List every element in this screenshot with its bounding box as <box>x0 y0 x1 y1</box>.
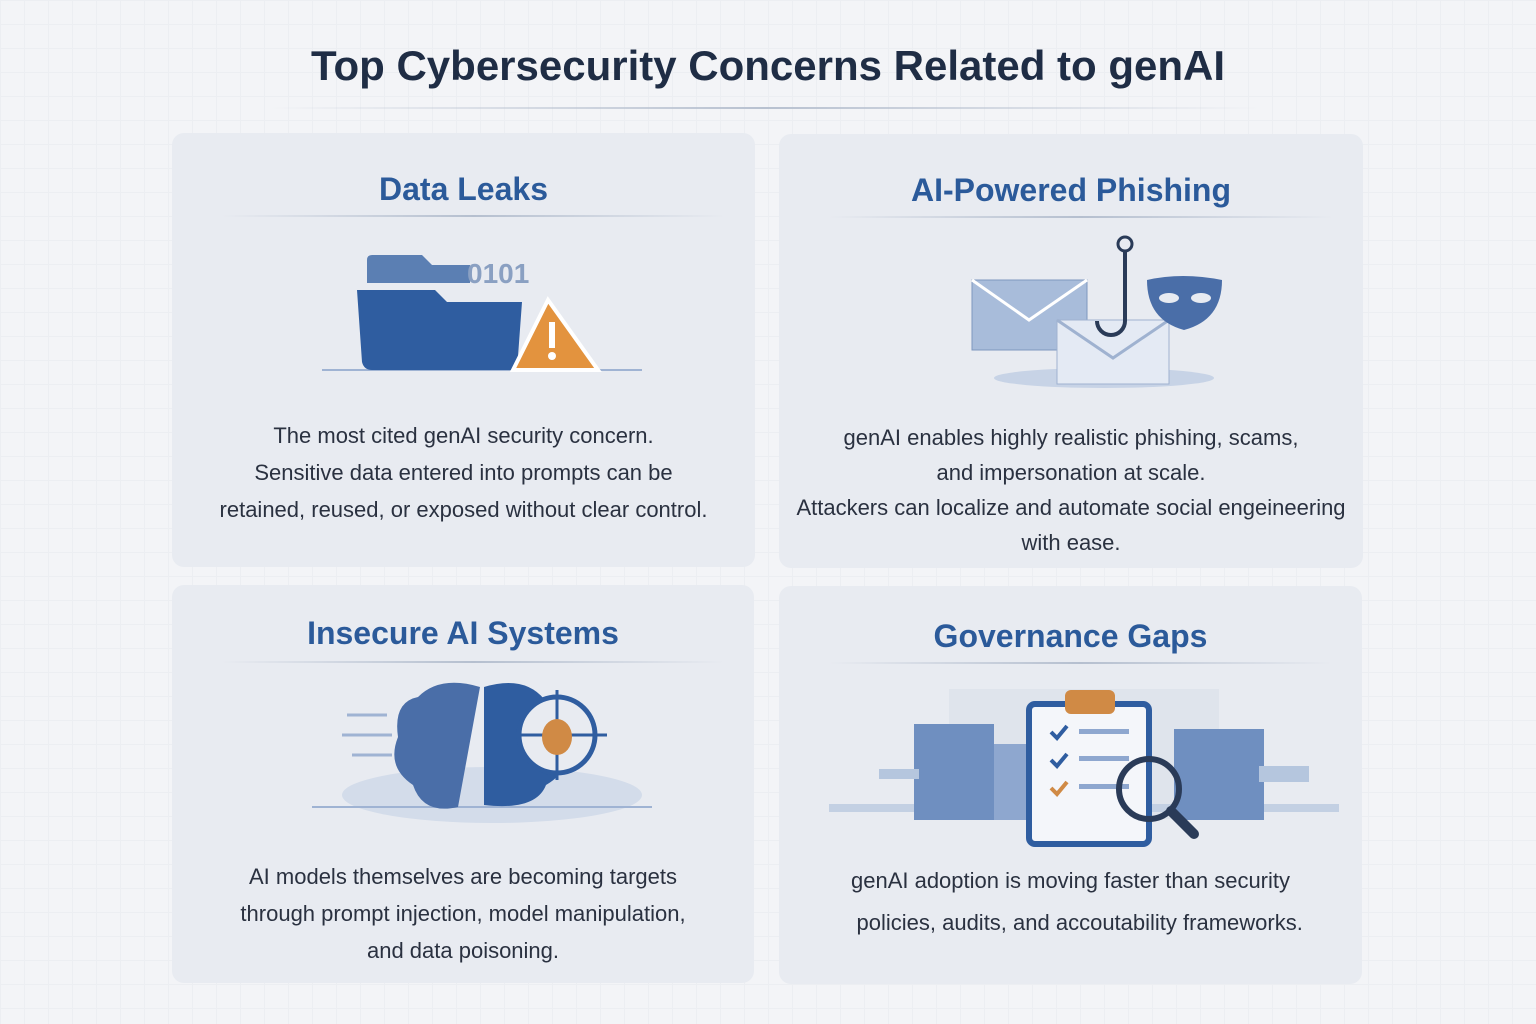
text: insecure: through prompt injection, model manipulation, <box>240 901 686 926</box>
panel: phishing <box>779 134 1363 568</box>
title: Top Cybersecurity Concerns Related to genAI <box>311 42 1225 89</box>
icon: folder with warning: 0101 <box>467 258 529 289</box>
icon: buildings, clipboard, magnifier <box>829 689 1339 847</box>
heading: insecure: Insecure AI Systems <box>307 615 619 651</box>
text: phishing <box>796 425 1346 555</box>
text: phishing: genAI enables highly realistic phishing, scams, <box>844 425 1298 450</box>
icon: folder with warning <box>322 255 642 372</box>
text: data leaks: The most cited genAI security concern. <box>273 423 654 448</box>
text: governance <box>851 868 1303 935</box>
text: data leaks <box>220 423 707 522</box>
panel: insecure AI systems <box>172 585 754 983</box>
text: governance: policies, audits, and accoutability frameworks. <box>856 910 1303 935</box>
heading: governance: Governance Gaps <box>934 618 1207 654</box>
text: data leaks: Sensitive data entered into prompts can be <box>254 460 673 485</box>
text: phishing: Attackers can localize and automate social engeineering <box>796 495 1346 520</box>
text: insecure <box>240 864 686 963</box>
text: data leaks: retained, reused, or exposed without clear control. <box>220 497 707 522</box>
panel: governance gaps <box>779 586 1362 984</box>
text: governance: genAI adoption is moving faster than security <box>851 868 1290 893</box>
text: insecure: AI models themselves are becoming targets <box>249 864 677 889</box>
heading: phishing: AI-Powered Phishing <box>911 172 1231 208</box>
heading: data leaks: Data Leaks <box>379 171 548 207</box>
text: phishing: and impersonation at scale. <box>936 460 1206 485</box>
icon: brain with target <box>312 682 652 823</box>
icon: envelopes, hook, mask <box>971 236 1222 388</box>
text: insecure: and data poisoning. <box>367 938 559 963</box>
text: phishing: with ease. <box>1021 530 1121 555</box>
panel: data leaks <box>172 133 755 567</box>
